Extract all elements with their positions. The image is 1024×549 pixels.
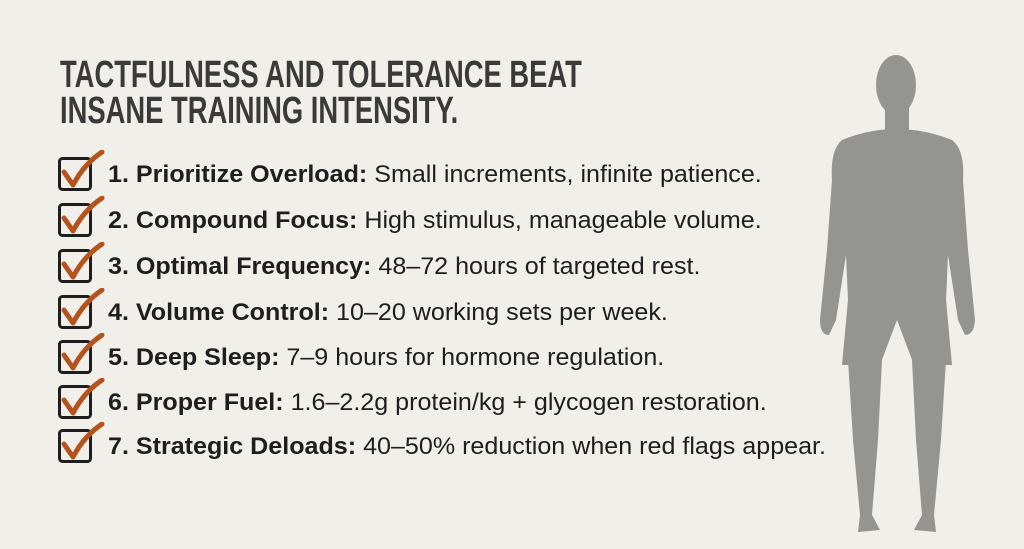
item 2: 2. Compound Focus: High stimulus, manageable volume. [108,207,762,234]
icon: checkbox [58,422,104,463]
item 3: 3. Optimal Frequency: 48–72 hours of targeted rest. [108,253,700,280]
icon: checkbox [58,242,104,283]
icon: checkbox [58,150,104,191]
item 4: 4. Volume Control: 10–20 working sets per week. [108,299,668,326]
icon: checkbox [58,333,104,374]
item 7: 7. Strategic Deloads: 40–50% reduction when red flags appear. [108,433,826,460]
item 4 [58,288,668,329]
title: TACTFULNESS AND TOLERANCE BEAT [60,54,582,96]
icon: checkbox [58,378,104,419]
icon: checkbox [58,288,104,329]
title: INSANE TRAINING INTENSITY. [60,90,458,132]
item 3 [58,242,700,283]
item 6 [58,378,767,419]
item 1: 1. Prioritize Overload: Small increments, infinite patience. [108,161,762,188]
item 2 [58,196,762,237]
item 7 [58,422,826,463]
item 5 [58,333,664,374]
icon: checkbox [58,196,104,237]
item 6: 6. Proper Fuel: 1.6–2.2g protein/kg + glycogen restoration. [108,389,767,416]
item 1 [58,150,762,191]
item 5: 5. Deep Sleep: 7–9 hours for hormone regulation. [108,344,664,371]
title [60,54,582,132]
human silhouette [820,55,975,532]
